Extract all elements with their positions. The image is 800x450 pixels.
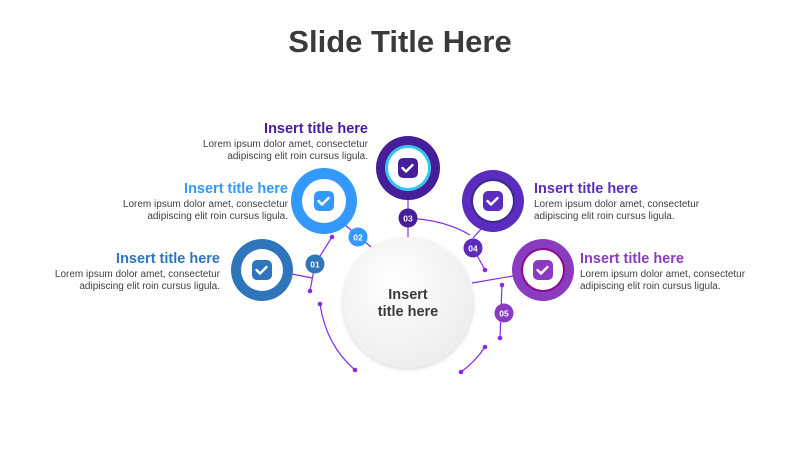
text 4 [534, 181, 700, 222]
connector dots [308, 235, 504, 374]
center circle: title here [378, 304, 438, 320]
text 3 [203, 121, 369, 162]
badges [306, 208, 514, 322]
text 5 [580, 251, 746, 292]
text 2 [123, 181, 289, 222]
text 5: adipiscing elit roin cursus ligula. [580, 281, 721, 292]
title: Slide Title Here [288, 24, 512, 59]
badges: 04 [468, 244, 478, 254]
text 1 [55, 251, 221, 292]
text 3: adipiscing elit roin cursus ligula. [227, 151, 368, 162]
text 2: Insert title here [184, 181, 288, 197]
text 4: Lorem ipsum dolor amet, consectetur [534, 199, 700, 210]
text 2: Lorem ipsum dolor amet, consectetur [123, 199, 289, 210]
step 5 circle [512, 239, 574, 301]
text 3: Insert title here [264, 121, 368, 137]
badges: 01 [310, 260, 320, 270]
text 2: adipiscing elit roin cursus ligula. [147, 211, 288, 222]
text 4: Insert title here [534, 181, 638, 197]
step 4 circle [462, 170, 524, 232]
text 1: Lorem ipsum dolor amet, consectetur [55, 269, 221, 280]
center circle: Insert [388, 287, 428, 303]
step 1 circle [231, 239, 293, 301]
text 3: Lorem ipsum dolor amet, consectetur [203, 139, 369, 150]
badges: 03 [403, 214, 413, 224]
text 1: Insert title here [116, 251, 220, 267]
connectors [292, 200, 513, 372]
text 5: Lorem ipsum dolor amet, consectetur [580, 269, 746, 280]
badges: 05 [499, 308, 509, 318]
text 4: adipiscing elit roin cursus ligula. [534, 211, 675, 222]
center circle [343, 238, 473, 368]
step 2 circle [291, 168, 357, 234]
badges: 02 [353, 232, 363, 242]
text 1: adipiscing elit roin cursus ligula. [79, 281, 220, 292]
step 3 circle [376, 136, 440, 200]
text 5: Insert title here [580, 251, 684, 267]
